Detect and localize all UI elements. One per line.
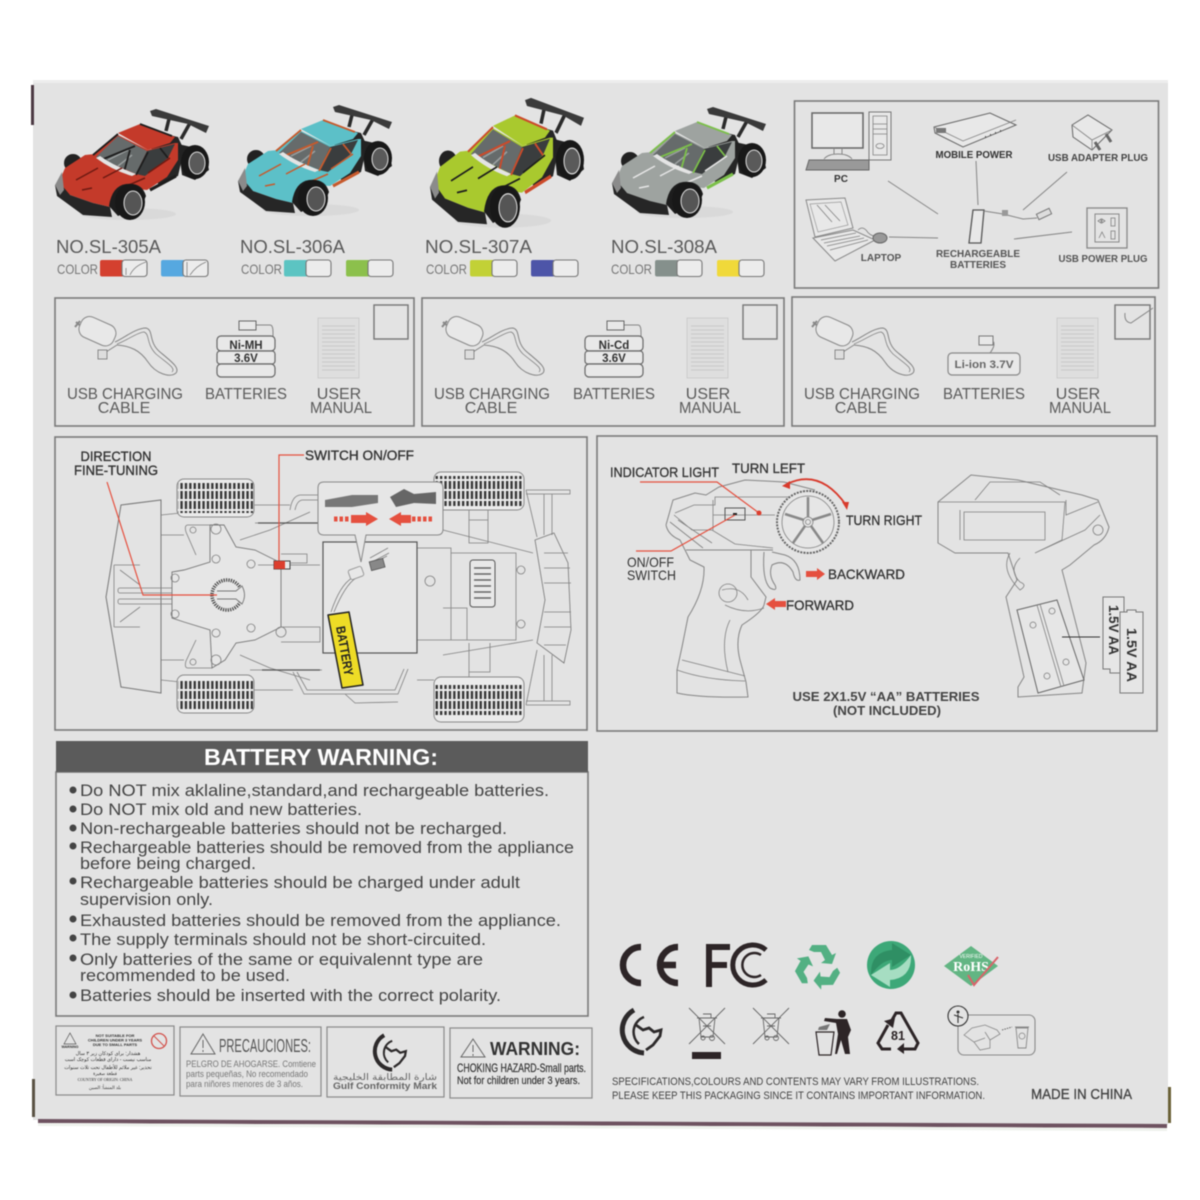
- warning label: precauciones: [180, 1027, 321, 1096]
- icon: laptop and mouse: LAPTOP: [861, 253, 902, 264]
- disclaimer: [612, 1076, 985, 1102]
- warning label: not suitable: مناسب نیست - دارای قطعات کوچک است: [65, 1057, 152, 1063]
- checkbox with tick: [1115, 305, 1153, 339]
- disclaimer: PLEASE KEEP THIS PACKAGING SINCE IT CONTAINS IMPORTANT INFORMATION.: [612, 1090, 985, 1102]
- car SL-306A: NO.SL-306A: [240, 237, 345, 257]
- icon: recycling code 81: [878, 1013, 918, 1054]
- icon: USB cable: [812, 314, 914, 375]
- warning label: not suitable: هشدار: برای کودکان زیر ۳ سال: [76, 1051, 141, 1057]
- labels: BATTERIES: [943, 386, 1025, 403]
- heading: BATTERY WARNING:: [204, 744, 438, 770]
- warning list: Do NOT mix old and new batteries.: [80, 800, 362, 819]
- checkbox: [374, 305, 408, 339]
- warning list: Non-rechargeable batteries should not be recharged.: [80, 819, 507, 838]
- warning list: supervision only.: [80, 890, 213, 909]
- icon: Ni-Cd battery pack: [585, 321, 643, 377]
- warning label: not suitable: WARNING: [62, 1045, 79, 1049]
- icon: Ni-Cd battery pack: 3.6V: [602, 353, 626, 365]
- warning list: Rechargeable batteries should be charged under adult: [80, 873, 520, 892]
- battery note: USE 2X1.5V “AA” BATTERIES: [792, 689, 980, 704]
- warning label: precauciones: PRECAUCIONES:: [219, 1036, 311, 1056]
- icon: Ni-MH battery pack: 3.6V: [234, 353, 258, 365]
- made in china: MADE IN CHINA: [1031, 1086, 1132, 1103]
- icon: tidy man: [816, 1010, 851, 1055]
- icon: user manual: [318, 318, 359, 378]
- car SL-307A: [425, 98, 584, 277]
- chassis drawing: [106, 472, 571, 722]
- car SL-305A: COLOR: [57, 261, 98, 277]
- labels: CABLE: [835, 400, 887, 417]
- icon: Ni-MH battery pack: Ni-MH: [229, 340, 263, 352]
- warning label: not suitable: COUNTRY OF ORIGIN: CHINA: [78, 1077, 133, 1082]
- heading: [56, 741, 588, 772]
- warning label: precauciones: para niñores menores de 3 años.: [186, 1079, 303, 1089]
- icon: USB adapter: [1048, 115, 1148, 164]
- warning list: Do NOT mix aklaline,standard,and rechargeable batteries.: [80, 781, 549, 800]
- labels: USER: [317, 386, 361, 403]
- control labels: INDICATOR LIGHT: [610, 464, 719, 480]
- icon: RoHS: VERIFIED: [959, 954, 983, 960]
- warning list: Rechargeable batteries should be removed from the appliance: [80, 838, 574, 857]
- panel: charging sources: [794, 101, 1158, 288]
- warning label: not suitable: [56, 1026, 174, 1095]
- battery label: [328, 612, 363, 688]
- icon: PC: PC: [834, 174, 848, 185]
- warning label: precauciones: parts pequeñas, No recomendado: [186, 1069, 308, 1079]
- car SL-306A: COLOR: [241, 261, 282, 277]
- switch on/off callout: SWITCH ON/OFF: [305, 447, 414, 463]
- gulf conformity mark: [327, 1027, 444, 1097]
- labels: [434, 386, 741, 417]
- icon: recycling code 81: 81: [891, 1029, 905, 1043]
- control labels: FORWARD: [786, 597, 854, 613]
- labels: MANUAL: [1049, 400, 1111, 417]
- direction fine-tuning callout: DIRECTION: [80, 448, 152, 464]
- battery note: (NOT INCLUDED): [833, 703, 941, 718]
- icon: CE mark: [623, 947, 678, 983]
- icon: user manual: [687, 318, 728, 378]
- car SL-306A: [238, 105, 393, 277]
- AA batteries: 1.5V AA: [1106, 605, 1121, 655]
- icon: package disposal: [948, 1006, 1035, 1055]
- icon: crossed bin with bar: [689, 1008, 725, 1059]
- steering wheel: [777, 491, 839, 553]
- icon: USB power socket: USB POWER PLUG: [1058, 254, 1148, 265]
- control labels: TURN LEFT: [732, 460, 805, 476]
- compliance marks: [622, 941, 1035, 1059]
- icon: recycling: [790, 945, 842, 994]
- gulf conformity mark: Gulf Conformity Mark: [333, 1081, 438, 1092]
- icon: Ni-MH battery pack: [217, 321, 275, 377]
- car SL-305A: NO.SL-305A: [56, 237, 161, 257]
- warning list: before being charged.: [80, 854, 256, 873]
- AA batteries: [1103, 597, 1143, 693]
- switch on/off callout: [274, 447, 414, 569]
- icon: user manual: [1057, 318, 1098, 378]
- icon: mobile power: [934, 113, 1016, 161]
- car SL-308A: COLOR: [611, 261, 652, 277]
- labels: USB CHARGING: [434, 386, 550, 403]
- labels: BATTERIES: [205, 386, 287, 403]
- warning label: choking hazard: Not for children under 3 years.: [457, 1075, 580, 1087]
- labels: [67, 386, 372, 417]
- labels: USB CHARGING: [67, 386, 183, 403]
- icon: PC: [806, 112, 891, 185]
- checkbox: [743, 305, 777, 339]
- icon: Li-ion battery: [948, 336, 1020, 375]
- control labels: [610, 460, 922, 613]
- warning list: Only batteries of the same or equivalennt type are: [80, 950, 483, 969]
- icon: Li-ion battery: Li-ion 3.7V: [954, 359, 1014, 371]
- panel: contents Li-ion: [792, 297, 1155, 426]
- icon: rechargeable battery: RECHARGEABLE: [936, 249, 1020, 260]
- labels: USER: [686, 386, 730, 403]
- icon: crossed bin: [753, 1008, 789, 1044]
- warning label: not suitable: NOT SUITABLE FOR: [96, 1033, 135, 1038]
- disclaimer: SPECIFICATIONS,COLOURS AND CONTENTS MAY VARY FROM ILLUSTRATIONS.: [612, 1076, 979, 1088]
- warning list: recommended to be used.: [80, 966, 290, 985]
- warning label: choking hazard: WARNING:: [490, 1039, 580, 1059]
- warning label: precauciones: PELGRO DE AHOGARSE. Comtiene: [186, 1059, 316, 1069]
- icon: USB power socket: [1058, 208, 1148, 265]
- icon: mobile power: MOBILE POWER: [936, 150, 1013, 161]
- warning label: not suitable: DUE TO SMALL PARTS: [93, 1042, 137, 1047]
- labels: BATTERIES: [573, 386, 655, 403]
- labels: USB CHARGING: [804, 386, 920, 403]
- labels: CABLE: [465, 400, 517, 417]
- callout: connector plugs: [318, 482, 443, 562]
- car SL-307A: NO.SL-307A: [425, 237, 532, 257]
- labels: CABLE: [98, 400, 150, 417]
- icon: rechargeable battery: BATTERIES: [950, 260, 1006, 271]
- car SL-307A: COLOR: [426, 261, 467, 277]
- remote back view: [938, 475, 1109, 697]
- gulf conformity mark: شارة المطابقة الخليجية: [333, 1072, 437, 1082]
- icon: rechargeable battery: [936, 208, 1052, 271]
- warning list: The supply terminals should not be short-circuited.: [80, 930, 486, 949]
- control labels: ON/OFF: [627, 554, 674, 570]
- icon: green dot: [867, 941, 915, 989]
- warning list: Exhausted batteries should be removed from the appliance.: [80, 911, 561, 930]
- control labels: BACKWARD: [828, 566, 905, 582]
- icon: laptop and mouse: [806, 198, 902, 264]
- control labels: SWITCH: [627, 567, 676, 583]
- icon: Ni-Cd battery pack: Ni-Cd: [599, 340, 629, 352]
- remote front view: [666, 480, 839, 697]
- labels: USER: [1056, 386, 1100, 403]
- direction fine-tuning callout: [74, 448, 217, 595]
- control labels: TURN RIGHT: [846, 512, 922, 528]
- icon: RoHS: RoHS: [953, 960, 989, 975]
- panel: car models: [55, 98, 766, 277]
- panel: contents Ni-Cd: [422, 298, 784, 426]
- car SL-308A: NO.SL-308A: [611, 237, 717, 257]
- labels: MANUAL: [310, 400, 372, 417]
- panel: chassis diagram: [55, 437, 587, 730]
- icon: RoHS: [944, 946, 998, 986]
- battery label: BATTERY: [333, 625, 357, 677]
- warning label: not suitable: تحذير: غير ملائم للأطفال تحت ثلاث سنوات: [64, 1064, 152, 1071]
- icon: USB cable: [442, 314, 544, 375]
- battery note: [792, 689, 980, 718]
- direction fine-tuning callout: FINE-TUNING: [74, 462, 158, 478]
- icon: gulf mark: [622, 1010, 661, 1053]
- car SL-305A: [55, 109, 209, 277]
- battery wires: [331, 548, 389, 612]
- panel: remote controller: [597, 436, 1157, 731]
- car SL-308A: [611, 107, 766, 277]
- labels: [804, 386, 1111, 417]
- AA batteries: 1.5V AA: [1124, 628, 1139, 682]
- icon: tyres: [177, 472, 524, 722]
- warning label: not suitable: قطعة صغيرة: [93, 1071, 117, 1076]
- warning label: choking hazard: CHOKING HAZARD-Small parts.: [457, 1061, 586, 1075]
- icon: USB cable: [75, 314, 177, 375]
- icon: USB adapter: USB ADAPTER PLUG: [1048, 153, 1148, 164]
- panel: battery warning: [56, 741, 588, 1016]
- icon: FCC mark: [709, 945, 766, 987]
- labels: MANUAL: [679, 400, 741, 417]
- warning label: choking hazard: [450, 1028, 592, 1098]
- warning label: not suitable: CHILDREN UNDER 3 YEARS: [88, 1038, 142, 1042]
- panel: contents Ni-MH: [55, 298, 414, 426]
- warning list: Batteries should be inserted with the correct polarity.: [80, 986, 501, 1005]
- warning list: [70, 781, 574, 1005]
- connector lines: [888, 161, 1072, 239]
- warning label: not suitable: بلد المنشأ: الصين: [89, 1084, 121, 1090]
